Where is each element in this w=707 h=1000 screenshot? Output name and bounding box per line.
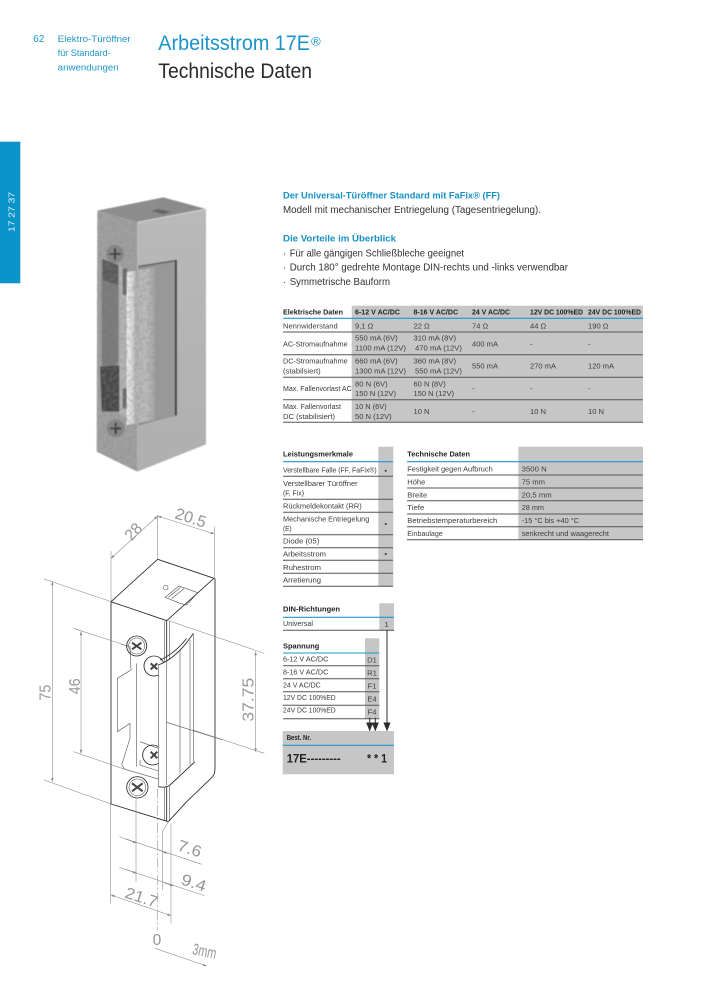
property names: Einbaulage <box>407 529 443 538</box>
voltage options: 24V DC 100%ED <box>283 706 336 715</box>
row: Max. Fallenvorlast AC: - <box>530 384 533 393</box>
row: Max. Fallenvorlast AC: - <box>588 384 591 393</box>
row: AC-Stromaufnahme: 310 mA (8V) <box>414 334 456 343</box>
section label: Elektro-Türöffner <box>58 34 132 45</box>
table: electrical data <box>283 306 643 422</box>
order number box <box>283 731 394 774</box>
advantages list: · <box>283 277 286 288</box>
side tab: 17 27 37 <box>6 192 16 232</box>
latch <box>158 633 223 787</box>
voltage options: 8-16 V AC/DC <box>283 667 329 676</box>
voltage codes: D1 <box>367 656 377 664</box>
dimension labels: 20.5 <box>173 506 208 532</box>
intro heading: Der Universal-Türöffner Standard mit FaFix® (FF) <box>283 191 500 202</box>
title: ® <box>311 36 321 48</box>
row: Nennwiderstand: 22 Ω <box>414 321 430 330</box>
feature markers <box>385 470 387 555</box>
row: Nennwiderstand: 44 Ω <box>530 321 547 330</box>
advantages list: Für alle gängigen Schließbleche geeignet <box>290 248 464 260</box>
row: Max. Fallenvorlast AC: Max. Fallenvorlast AC <box>283 384 352 393</box>
side tab <box>0 142 20 283</box>
order number box: 17E--------- <box>287 751 341 765</box>
row: Nennwiderstand <box>283 321 609 330</box>
row: Max. Fallenvorlast DC: Max. Fallenvorlast <box>283 402 342 411</box>
row: DC-Stromaufnahme: 120 mA <box>588 362 615 371</box>
property names: Höhe <box>407 478 425 487</box>
feature list: Diode (05) <box>283 536 320 545</box>
order number box: Best. Nr. <box>287 733 311 742</box>
dimension labels: 28 <box>122 520 146 544</box>
row: Max. Fallenvorlast AC: 80 N (6V) <box>355 380 388 389</box>
row: AC-Stromaufnahme: 470 mA (12V) <box>415 343 462 352</box>
row: DC-Stromaufnahme: 660 mA (6V) <box>355 356 398 365</box>
table header row: 24V DC 100%ED <box>588 307 641 316</box>
product photo: door opener <box>93 197 206 475</box>
dimension labels: 37.75 <box>240 678 257 722</box>
advantages list: Durch 180° gedrehte Montage DIN-rechts und -links verwendbar <box>290 263 569 274</box>
section label: anwendungen <box>58 62 119 73</box>
row: Max. Fallenvorlast AC: 150 N (12V) <box>414 389 454 398</box>
row: DC-Stromaufnahme: 360 mA (8V) <box>414 356 456 365</box>
intro text: Modell mit mechanischer Entriegelung (Tagesentriegelung). <box>283 205 541 216</box>
table header row: 8-16 V AC/DC <box>414 307 458 316</box>
property values: -15 °C bis +40 °C <box>522 516 579 525</box>
property values: 28 mm <box>522 503 544 512</box>
feature list: Verstellbare Falle (FF, FaFix®) <box>283 466 377 475</box>
row: AC-Stromaufnahme: - <box>530 339 533 348</box>
row: Nennwiderstand: 74 Ω <box>472 321 489 330</box>
row: DC-Stromaufnahme: 550 mA (12V) <box>415 366 462 375</box>
voltage options: 24 V AC/DC <box>283 680 321 689</box>
row: Nennwiderstand: 190 Ω <box>588 321 609 330</box>
row: DC-Stromaufnahme: DC-Stromaufnahme <box>283 356 348 365</box>
dimension labels: 75 <box>38 685 55 701</box>
housing outline <box>111 559 215 822</box>
section label <box>58 34 132 73</box>
advantages heading: Die Vorteile im Überblick <box>283 234 397 244</box>
table: DIN-Richtungen: DIN-Richtungen <box>283 605 340 614</box>
row: DC-Stromaufnahme: 1300 mA (12V) <box>355 366 406 375</box>
property names: Festigkeit gegen Aufbruch <box>407 465 493 474</box>
row: AC-Stromaufnahme: 1100 mA (12V) <box>355 343 406 352</box>
table header row: 24 V AC/DC <box>472 307 510 316</box>
property values: senkrecht und waagerecht <box>522 529 610 538</box>
voltage options: 12V DC 100%ED <box>283 693 336 702</box>
voltage codes <box>367 656 377 716</box>
table: DIN-Richtungen: 1 <box>384 620 389 629</box>
property names: Breite <box>407 490 427 499</box>
table header row: 6-12 V AC/DC <box>355 307 400 316</box>
screws <box>127 636 164 798</box>
row: Max. Fallenvorlast DC: 50 N (12V) <box>355 412 392 421</box>
table: Leistungsmerkmale <box>283 447 393 587</box>
feature list <box>283 466 377 585</box>
property values: 3500 N <box>522 465 547 474</box>
row: DC-Stromaufnahme: (stabilsiert) <box>283 366 321 375</box>
feature list: Rückmeldekontakt (RR) <box>283 501 362 510</box>
voltage options: 6-12 V AC/DC <box>283 655 329 664</box>
property names: Tiefe <box>407 503 424 512</box>
voltage codes: R1 <box>367 668 377 678</box>
row: Max. Fallenvorlast DC: 10 N <box>530 407 546 416</box>
row: DC-Stromaufnahme: 550 mA <box>472 362 499 371</box>
advantages list: · <box>283 248 286 260</box>
dimension labels: 21.7 <box>123 885 160 911</box>
dimension labels: 3mm <box>191 941 218 963</box>
table header row: 12V DC 100%ED <box>530 307 583 316</box>
row: AC-Stromaufnahme: - <box>588 339 591 348</box>
voltage options <box>283 655 336 715</box>
technical line drawing with dimensions <box>38 506 264 966</box>
row: DC-Stromaufnahme <box>283 356 615 375</box>
dimension lines <box>44 515 264 966</box>
voltage codes: E4 <box>367 694 377 704</box>
row: AC-Stromaufnahme <box>283 334 591 352</box>
title: Arbeitsstrom 17E <box>158 31 310 55</box>
table: Technische Daten <box>407 447 643 540</box>
table: DIN-Richtungen: Universal <box>283 619 313 628</box>
table: Spannung: Spannung <box>283 641 320 650</box>
dimension labels: 46 <box>67 678 84 694</box>
feature list: (E) <box>283 524 292 533</box>
table: Leistungsmerkmale: Leistungsmerkmale <box>283 450 353 459</box>
row: Max. Fallenvorlast AC: 60 N (8V) <box>414 380 446 389</box>
row: AC-Stromaufnahme: 400 mA <box>472 339 499 348</box>
row: Max. Fallenvorlast AC: - <box>472 384 475 393</box>
feature list: Ruhestrom <box>283 563 321 572</box>
row: AC-Stromaufnahme: AC-Stromaufnahme <box>283 339 348 348</box>
row: Max. Fallenvorlast DC: 10 N <box>588 407 604 416</box>
row: Nennwiderstand: 9,1 Ω <box>355 321 374 330</box>
dimension labels: 0 <box>153 932 161 949</box>
row: Max. Fallenvorlast DC: 10 N <box>414 407 430 416</box>
dimension labels: 9.4 <box>179 872 208 896</box>
feature list: Arbeitsstrom <box>283 550 326 559</box>
dimension labels: 7.6 <box>175 838 204 861</box>
property values <box>522 465 610 538</box>
row: Max. Fallenvorlast DC <box>283 402 604 421</box>
subtitle: Technische Daten <box>158 59 312 83</box>
feature list: Arretierung <box>283 576 321 585</box>
row: DC-Stromaufnahme: 270 mA <box>530 362 557 371</box>
row: AC-Stromaufnahme: 550 mA (6V) <box>355 334 398 343</box>
advantages list: Symmetrische Bauform <box>290 277 390 288</box>
feature list: (F, Fix) <box>283 489 304 498</box>
advantages list <box>283 248 569 288</box>
table: Spannung <box>283 638 379 719</box>
voltage codes: F1 <box>368 682 376 690</box>
row: Max. Fallenvorlast DC: DC (stabilisiert) <box>283 412 335 421</box>
table: Technische Daten: Technische Daten <box>407 450 470 459</box>
arrows to order number <box>370 630 387 730</box>
row: Max. Fallenvorlast AC <box>283 380 591 398</box>
order number box: * * 1 <box>367 751 387 765</box>
row: Nennwiderstand: Nennwiderstand <box>283 321 338 330</box>
feature list: Mechanische Entriegelung <box>283 515 369 524</box>
row: Max. Fallenvorlast AC: 150 N (12V) <box>355 389 396 398</box>
voltage codes: F4 <box>368 708 376 716</box>
advantages list: · <box>283 263 286 274</box>
row: Max. Fallenvorlast DC: - <box>472 407 475 416</box>
property values: 75 mm <box>522 478 545 487</box>
dimension labels <box>38 506 257 963</box>
section label: für Standard- <box>58 48 111 59</box>
table: DIN-Richtungen <box>283 603 394 631</box>
row: Max. Fallenvorlast DC: 10 N (6V) <box>355 402 387 411</box>
property names <box>407 465 497 538</box>
feature list: Verstellbarer Türöffner <box>283 479 358 488</box>
table header row <box>283 307 641 316</box>
property values: 20,5 mm <box>522 490 552 499</box>
property names: Betriebstemperaturbereich <box>407 516 497 525</box>
table header row: Elektrische Daten <box>283 307 343 316</box>
page number: 62 <box>33 34 45 45</box>
